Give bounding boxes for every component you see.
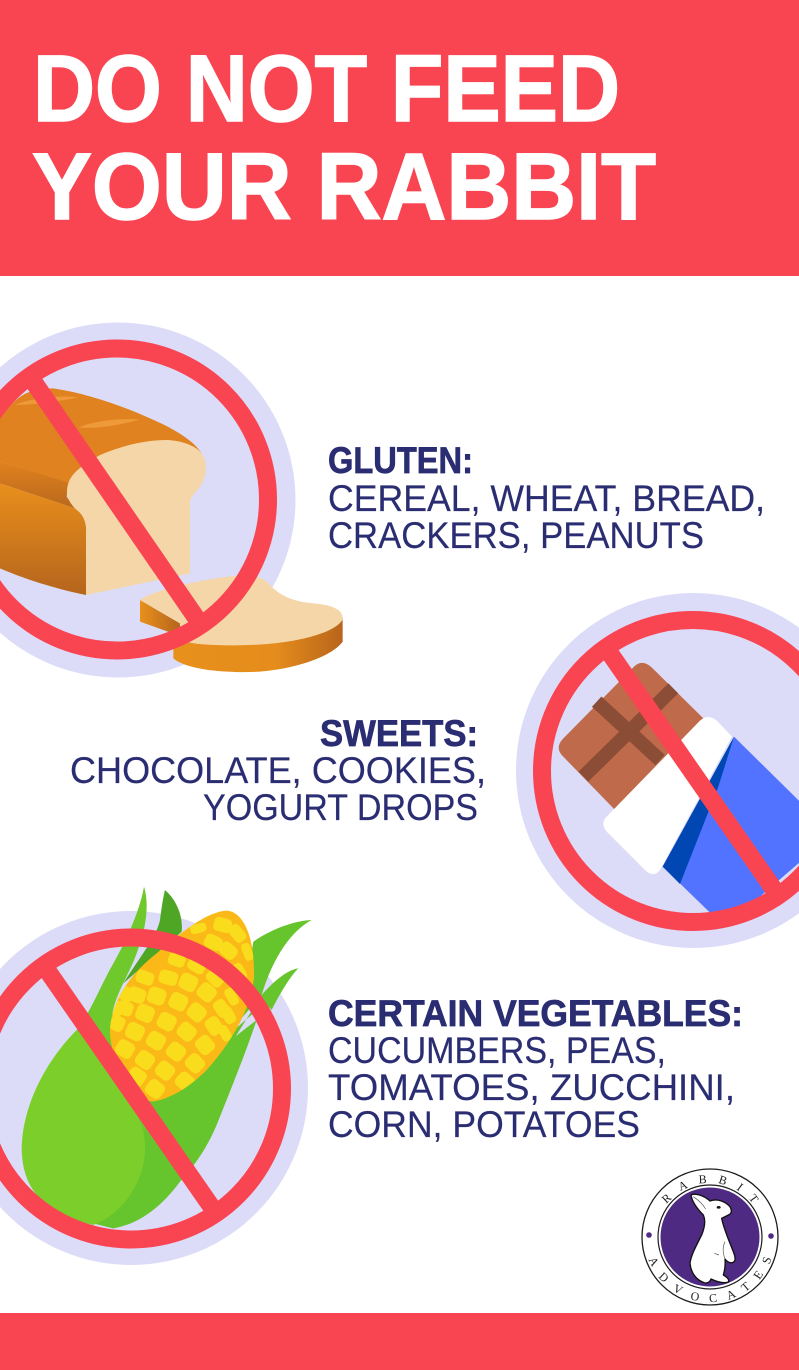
text block: certain vegetables: CUCUMBERS, PEAS, bbox=[328, 1030, 666, 1071]
icon: chocolate bar bbox=[559, 663, 799, 913]
logo: rabbit advocates bbox=[641, 1168, 779, 1306]
title: YOUR RABBIT bbox=[32, 134, 656, 240]
text block: sweets bbox=[70, 713, 486, 828]
lavender circle bbox=[0, 322, 296, 678]
logo: rabbit advocates: RABBIT bbox=[661, 1175, 759, 1204]
footer banner bbox=[0, 1313, 799, 1370]
lavender circle bbox=[516, 593, 799, 948]
icon: rabbit bbox=[690, 1194, 735, 1283]
icon: bread loaf and slice bbox=[0, 388, 343, 672]
icon: corn cob bbox=[22, 887, 312, 1228]
title: DO NOT FEED bbox=[33, 36, 620, 142]
text block: certain vegetables bbox=[328, 993, 743, 1145]
prohibition sign bbox=[542, 620, 799, 922]
text block: gluten: GLUTEN: bbox=[328, 440, 473, 481]
panel: chocolate icon bbox=[516, 593, 799, 948]
text block: certain vegetables: CORN, POTATOES bbox=[328, 1104, 640, 1145]
text block: gluten bbox=[328, 440, 765, 556]
text block: gluten: CEREAL, WHEAT, BREAD, bbox=[328, 478, 765, 519]
text block: certain vegetables: TOMATOES, ZUCCHINI, bbox=[328, 1067, 735, 1108]
logo: rabbit advocates: ADVOCATES bbox=[648, 1257, 771, 1302]
panel: corn icon bbox=[0, 887, 312, 1265]
panel: bread icon bbox=[0, 322, 343, 678]
prohibition sign bbox=[0, 348, 268, 650]
prohibition sign bbox=[0, 938, 282, 1240]
text block: sweets: YOGURT DROPS bbox=[203, 787, 478, 828]
lavender circle bbox=[0, 911, 308, 1265]
text block: sweets: CHOCOLATE, COOKIES, bbox=[70, 750, 486, 791]
header banner bbox=[0, 0, 799, 276]
title bbox=[32, 36, 656, 240]
text block: sweets: SWEETS: bbox=[320, 713, 478, 754]
text block: gluten: CRACKERS, PEANUTS bbox=[328, 515, 704, 556]
text block: certain vegetables: CERTAIN VEGETABLES: bbox=[328, 993, 743, 1034]
